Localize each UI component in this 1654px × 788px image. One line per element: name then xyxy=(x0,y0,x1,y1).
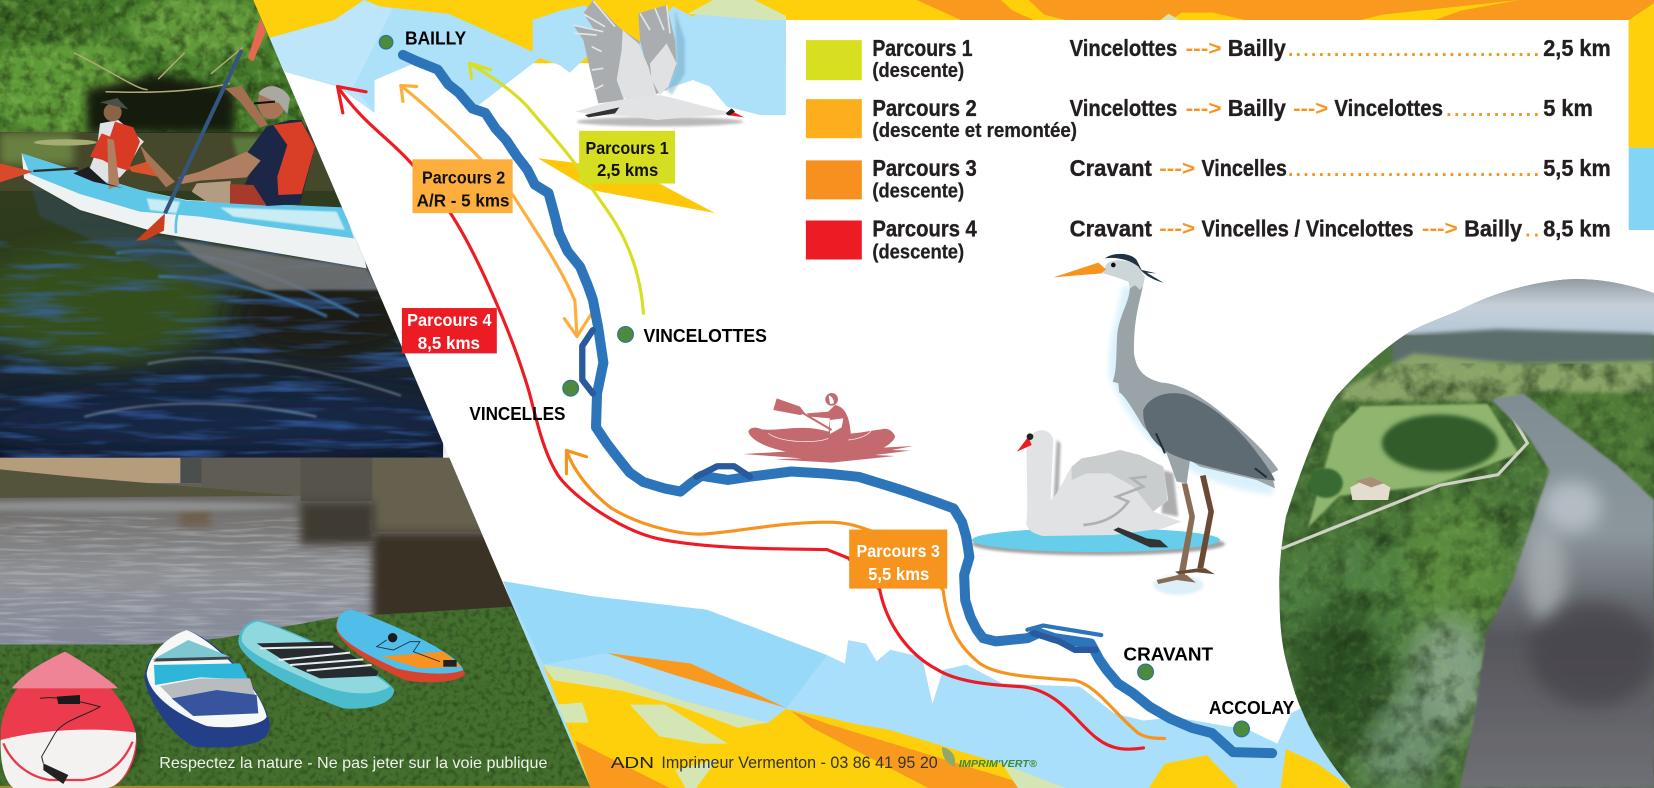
legend row: Parcours 1: ---> xyxy=(1186,38,1222,60)
legend row: Parcours 4: Bailly xyxy=(1464,215,1523,241)
label: Parcours 4: Parcours 4 xyxy=(407,310,492,330)
legend row: Parcours 3: (descente) xyxy=(872,180,964,202)
label: Parcours 4: 8,5 kms xyxy=(418,333,480,353)
legend row: Parcours 1: (descente) xyxy=(872,60,964,82)
place: Vincelles: VINCELLES xyxy=(469,403,565,424)
place: Accolay: ACCOLAY xyxy=(1209,697,1294,718)
label: Parcours 2 xyxy=(412,159,513,213)
legend row: Parcours 3: ---> xyxy=(1159,158,1195,180)
legend row: Parcours 1: 2,5 km xyxy=(1543,35,1611,61)
legend row: Parcours 4: ---> xyxy=(1159,218,1195,240)
label: Parcours 3: 5,5 kms xyxy=(868,564,929,584)
board: red xyxy=(1,652,143,788)
photo: paddle boards on bank xyxy=(0,458,601,788)
footer: printer credit: Imprimeur Vermenton - 03 86 41 95 20 xyxy=(661,753,938,772)
label: Parcours 4 xyxy=(402,308,497,353)
legend row: Parcours 2: Vincelottes xyxy=(1334,95,1443,121)
far water band xyxy=(0,133,348,191)
legend row: Parcours 3: Vincelles xyxy=(1201,155,1287,181)
label: Parcours 1: Parcours 1 xyxy=(585,138,669,158)
legend row: Parcours 1 xyxy=(806,35,1611,82)
label: Parcours 3: Parcours 3 xyxy=(857,541,940,561)
passenger rear xyxy=(240,120,315,206)
paddle shaft and blades xyxy=(165,50,242,213)
legend row: Parcours 1: Bailly xyxy=(1228,35,1286,61)
top decorative band xyxy=(253,0,1654,148)
legend row: Parcours 1: ................................. xyxy=(1288,40,1539,61)
light blue top water shape xyxy=(269,0,786,115)
legend row: Parcours 1: Parcours 1 xyxy=(872,35,973,61)
kayak and paddlers xyxy=(0,50,380,290)
label: Parcours 2: A/R - 5 kms xyxy=(417,191,510,211)
yellow shard under Parcours 1 xyxy=(538,158,715,213)
legend row: Parcours 2 xyxy=(806,95,1593,142)
place: Bailly: BAILLY xyxy=(405,27,466,48)
grass xyxy=(0,607,601,788)
river Yonne xyxy=(403,55,1272,753)
label: Parcours 1: 2,5 kms xyxy=(597,160,658,180)
legend row: Parcours 2: Parcours 2 xyxy=(872,95,977,121)
board: teal xyxy=(238,620,394,709)
footer: Imprim'Vert logo: IMPRIM'VERT® xyxy=(959,758,1037,770)
passenger front xyxy=(88,120,144,182)
label: Parcours 3 xyxy=(849,530,947,589)
legend row: Parcours 4: Vincelles / Vincelottes xyxy=(1201,215,1413,241)
legend row: Parcours 2: ---> xyxy=(1293,98,1328,120)
legend row: Parcours 4: ---> xyxy=(1422,218,1458,240)
legend row: Parcours 3: Cravant xyxy=(1070,155,1152,181)
footer: printer credit: ADN xyxy=(611,755,654,772)
place: Vincelottes: VINCELOTTES xyxy=(643,325,767,346)
route: Parcours 3 orange line xyxy=(566,450,1165,738)
place: Vincelles xyxy=(469,380,579,424)
legend row: Parcours 2: (descente et remontée) xyxy=(872,120,1077,142)
legend row: Parcours 2: ............ xyxy=(1446,100,1539,121)
label: Parcours 1 xyxy=(579,131,675,184)
meadow, trees, house and towpath xyxy=(1282,401,1527,549)
bottom water and colour shapes xyxy=(503,581,1361,788)
place: Accolay xyxy=(1209,697,1294,737)
legend row: Parcours 2: ---> xyxy=(1186,98,1222,120)
place: Cravant xyxy=(1123,643,1214,680)
sky and far hills xyxy=(1338,279,1654,404)
route: Parcours 2 light orange line xyxy=(401,85,592,337)
footer: nature notice: Respectez la nature - Ne pas jeter sur la voie publique xyxy=(159,755,548,772)
photo: kayak on river xyxy=(0,0,464,458)
route: Parcours 1 yellow-green line xyxy=(469,63,643,313)
legend row: Parcours 4: .. xyxy=(1525,220,1539,241)
board: blue with orange pad xyxy=(336,609,465,682)
legend row: Parcours 3: Parcours 3 xyxy=(872,155,977,181)
water ripples xyxy=(0,237,464,458)
label: Parcours 2: Parcours 2 xyxy=(422,168,505,188)
legend row: Parcours 3 xyxy=(806,155,1611,202)
legend row: Parcours 4 xyxy=(806,215,1611,263)
photo: paddle boards xyxy=(1,609,465,788)
legend row: Parcours 4: Parcours 4 xyxy=(872,215,977,241)
forest texture xyxy=(1266,364,1654,788)
legend row: Parcours 3: ................................. xyxy=(1288,160,1539,181)
foliage xyxy=(0,0,306,133)
footer: Imprim'Vert logo xyxy=(942,747,1037,770)
legend row: Parcours 3: 5,5 km xyxy=(1543,155,1611,181)
legend row: Parcours 2: Bailly xyxy=(1228,95,1286,121)
water texture xyxy=(0,517,380,654)
legend row: Parcours 2: Vincelottes xyxy=(1070,95,1177,121)
bank and bridge xyxy=(0,458,520,649)
icon: heron xyxy=(1053,254,1278,595)
legend row: Parcours 4: 8,5 km xyxy=(1543,215,1611,241)
place: Cravant: CRAVANT xyxy=(1123,643,1214,664)
upper paddle blade xyxy=(248,18,266,61)
route: Parcours 4 red line xyxy=(338,87,1143,749)
legend row: Parcours 1: Vincelottes xyxy=(1070,35,1177,61)
hull xyxy=(22,153,367,268)
legend row: Parcours 4: (descente) xyxy=(872,241,964,263)
icon: sitting swan xyxy=(972,430,1225,555)
right edge colour column xyxy=(1629,20,1654,230)
icon: kayaker xyxy=(743,393,913,463)
photo: aerial view of river xyxy=(1266,274,1654,788)
river xyxy=(1460,393,1654,788)
legend xyxy=(806,35,1611,263)
board: blue and white xyxy=(144,630,270,747)
icon: flying swan xyxy=(573,0,744,126)
legend row: Parcours 2: 5 km xyxy=(1543,95,1593,121)
place: Bailly xyxy=(379,27,466,49)
legend row: Parcours 4: Cravant xyxy=(1070,215,1152,241)
